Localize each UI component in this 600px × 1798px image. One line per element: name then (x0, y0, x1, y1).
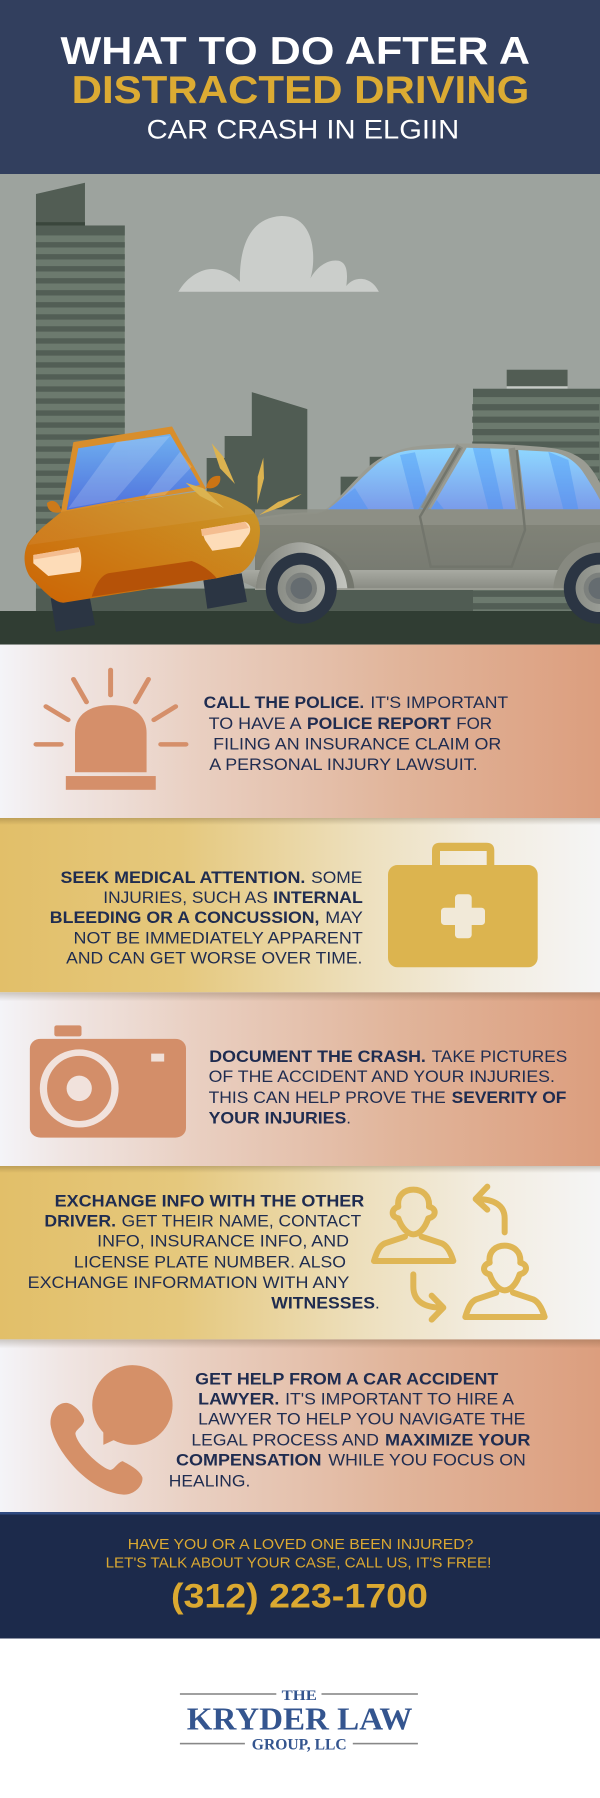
text: seek medical attention: MAY (325, 908, 363, 927)
panel: document the crash (0, 992, 600, 1166)
text: get help from a lawyer: MAXIMIZE YOUR (385, 1431, 530, 1450)
text: get help from a lawyer: HEALING. (169, 1471, 250, 1490)
grey car (243, 444, 600, 624)
icon: cloud (178, 216, 379, 292)
road (0, 611, 600, 645)
headlights (33, 522, 250, 576)
title line 2: DISTRACTED DRIVING (72, 69, 529, 112)
text: exchange info: LICENSE PLATE NUMBER. ALSO (74, 1252, 346, 1271)
call to action text (106, 1536, 491, 1572)
background buildings and cloud (36, 183, 600, 611)
title line 1: WHAT TO DO AFTER A (60, 30, 530, 73)
text: seek medical attention: NOT BE IMMEDIATELY APPARENT (74, 928, 363, 947)
text: get help from a lawyer: IT'S IMPORTANT TO HIRE A (285, 1390, 515, 1408)
text: document the crash: DOCUMENT THE CRASH. (209, 1047, 426, 1066)
icon: two people exchanging info (374, 1187, 545, 1320)
text: seek medical attention: AND CAN GET WORSE OVER TIME. (66, 948, 362, 967)
text: exchange info: WITNESSES (271, 1294, 375, 1312)
text: document the crash (209, 1047, 567, 1128)
text: exchange info (28, 1191, 380, 1312)
building: centre silhouette (36, 392, 473, 611)
text: exchange info: . (375, 1294, 380, 1312)
text: seek medical attention: INJURIES, SUCH AS (103, 888, 268, 907)
panel: exchange info (0, 1166, 600, 1339)
icon: impact sparks (186, 443, 302, 515)
text: call the police: IT'S IMPORTANT (370, 693, 508, 712)
footer logo: KRYDER LAW (187, 1701, 412, 1737)
text: exchange info: EXCHANGE INFORMATION WITH ANY (28, 1273, 349, 1292)
panel: call the police (0, 645, 600, 818)
text: get help from a lawyer: GET HELP FROM A CAR ACCIDENT (195, 1370, 499, 1389)
text: document the crash: OF THE ACCIDENT AND YOUR INJURIES. (209, 1067, 555, 1086)
text: get help from a lawyer: LAWYER. (198, 1390, 279, 1408)
text: seek medical attention: SEEK MEDICAL ATTENTION. (60, 868, 305, 887)
building: right block (473, 370, 600, 611)
text: get help from a lawyer (169, 1370, 530, 1490)
phone number: (312) 223-1700 (171, 1578, 428, 1616)
icon: first aid kit (388, 843, 538, 967)
door lines and pillars (420, 446, 525, 567)
icon: phone with speech bubble (50, 1365, 173, 1495)
text: call the police: A PERSONAL INJURY LAWSUIT. (209, 755, 478, 774)
text: document the crash: TAKE PICTURES (432, 1047, 567, 1066)
car windows (328, 448, 600, 509)
text: seek medical attention: BLEEDING OR A CONCUSSION, (50, 908, 320, 927)
sill (243, 570, 600, 588)
panel: seek medical attention (0, 818, 600, 992)
icon: camera (30, 1025, 186, 1138)
text: document the crash: . (346, 1108, 351, 1128)
wheel arches (256, 542, 600, 588)
text: seek medical attention (50, 868, 363, 967)
illustration: car crash scene (0, 174, 600, 645)
call to action text: LET'S TALK ABOUT YOUR CASE, CALL US, IT'S FREE! (106, 1555, 491, 1572)
building: left tower (36, 183, 125, 611)
text: seek medical attention: INTERNAL (273, 888, 363, 907)
text: seek medical attention: SOME (311, 868, 362, 887)
header panel (0, 0, 600, 174)
text: get help from a lawyer: LAWYER TO HELP YOU NAVIGATE THE (198, 1410, 525, 1428)
text: document the crash: THIS CAN HELP PROVE THE (209, 1088, 446, 1107)
call to action text: HAVE YOU OR A LOVED ONE BEEN INJURED? (128, 1536, 473, 1553)
footer logo: THE (282, 1688, 317, 1704)
rear wheel (564, 553, 600, 624)
footer logo (0, 1638, 600, 1798)
text: call the police: CALL THE POLICE. (204, 693, 364, 712)
text: call the police: POLICE REPORT (307, 714, 451, 733)
text: get help from a lawyer: LEGAL PROCESS AND (191, 1431, 379, 1450)
text: exchange info: INFO, INSURANCE INFO, AND (97, 1232, 349, 1251)
text: document the crash: YOUR INJURIES (209, 1108, 346, 1128)
text: call the police: FILING AN INSURANCE CLAIM OR (213, 734, 501, 754)
text: get help from a lawyer: WHILE YOU FOCUS ON (328, 1451, 526, 1470)
text: call the police: TO HAVE A (209, 714, 302, 733)
text: exchange info: GET THEIR NAME, CONTACT (122, 1212, 361, 1231)
front wheel (266, 553, 337, 624)
car underbody (92, 561, 217, 597)
text: get help from a lawyer: COMPENSATION (176, 1451, 322, 1470)
footer logo: GROUP, LLC (252, 1737, 347, 1754)
text: exchange info: DRIVER. (44, 1212, 116, 1231)
subtitle: CAR CRASH IN ELGIIN (147, 114, 459, 144)
icon: siren (36, 670, 186, 790)
text: exchange info: EXCHANGE INFO WITH THE OTHER (55, 1191, 364, 1210)
panel: get help from a lawyer (0, 1339, 600, 1512)
orange car (25, 427, 260, 632)
text: call the police: FOR (456, 714, 492, 733)
text: call the police (204, 693, 508, 774)
call to action band (0, 1512, 600, 1638)
text: document the crash: SEVERITY OF (452, 1088, 566, 1107)
